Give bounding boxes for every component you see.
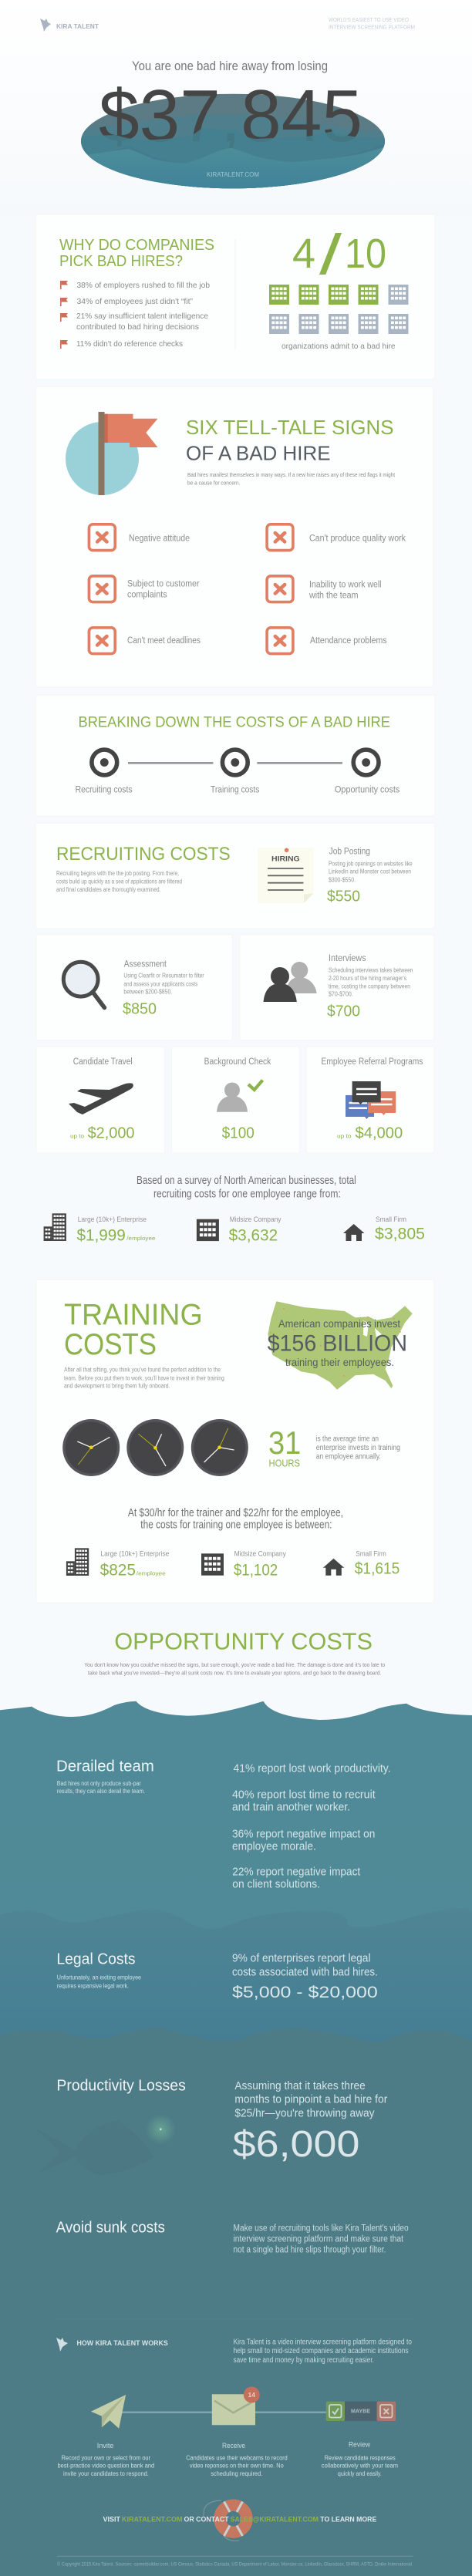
timeline labels: Recruiting costs xyxy=(76,785,133,794)
heading xyxy=(64,1299,203,1361)
heading: PICK BAD HIRES? xyxy=(59,253,183,270)
stat: 4/10 xyxy=(292,224,386,286)
step: invite: best-practice video question bank and xyxy=(57,2463,154,2470)
interviews text: time, costing the company between xyxy=(329,983,410,990)
step: review xyxy=(322,2441,398,2477)
label: Candidate Travel xyxy=(73,1057,133,1067)
map statement: American companies invest xyxy=(278,1317,400,1330)
panel: candidate travel xyxy=(36,1047,164,1153)
derailed team stats: 36% report negative impact on xyxy=(232,1828,375,1841)
stat: 31 hours: 31 xyxy=(268,1425,301,1461)
job posting text: Job Posting xyxy=(329,847,370,856)
heading: COSTS xyxy=(64,1328,157,1361)
assessment text xyxy=(123,959,204,995)
header xyxy=(40,18,415,32)
sign: customer complaints: complaints xyxy=(127,591,167,600)
icons: ten buildings xyxy=(269,285,409,334)
panel: training costs xyxy=(36,1280,434,1603)
call to action xyxy=(103,2515,376,2524)
job posting text: Posting job openings on websites like xyxy=(329,861,413,868)
training cost: large enterprise: Large (10k+) Enterprise xyxy=(100,1550,169,1559)
derailed team stats xyxy=(232,1762,391,1890)
avoid sunk costs text: Make use of recruiting tools like Kira Talent's video xyxy=(233,2224,409,2233)
sources line: © Copyright 2015 Kira Talent. Sources: careerbuilder.com, US Census, Statistics Canada, US Department of Labor, Monster.ca, LinkedIn, Glassdoor, SHRM, ASTD, Drake International xyxy=(57,2562,412,2568)
recruiting cost: large enterprise: Large (10k+) Enterprise xyxy=(78,1216,147,1224)
how Kira Talent works xyxy=(56,2319,413,2477)
interviews price: $700 xyxy=(327,1003,360,1020)
assessment text: between $200-$850. xyxy=(123,988,172,995)
stat text: is the average time an xyxy=(316,1435,379,1443)
legal costs stat: 9% of enterprises report legal xyxy=(232,1951,370,1964)
price: $4,000 xyxy=(355,1125,403,1142)
reason list: 38% of employers rushed to fill the job xyxy=(77,281,210,290)
sign: negative attitude xyxy=(89,524,190,551)
call to action: OR CONTACT xyxy=(184,2515,229,2524)
step: receive: video reponses on their own time. No xyxy=(190,2463,284,2470)
training cost: midsize: $1,102 xyxy=(234,1560,278,1579)
reason list: contributed to bad hiring decisions xyxy=(76,322,199,332)
derailed team heading: Derailed team xyxy=(56,1758,154,1775)
icon: hiring note xyxy=(258,848,314,903)
icon: envelope with badge: 14 xyxy=(248,2392,256,2399)
call to action: SALES@KIRATALENT.COM xyxy=(231,2515,319,2524)
section heading: HOW KIRA TALENT WORKS xyxy=(77,2339,168,2348)
heading: RECRUITING COSTS xyxy=(56,844,231,865)
derailed team xyxy=(56,1758,391,1890)
rate statement: the costs for training one employee is between: xyxy=(140,1519,332,1532)
survey statement xyxy=(137,1174,356,1200)
icon: life preserver xyxy=(204,2500,247,2541)
step: receive: Receive xyxy=(222,2442,245,2450)
intro text: be a cause for concern. xyxy=(187,481,241,486)
opportunity costs intro: take back what you've invested—they're all sunk costs now. It's time to evaluate your options, and go back to the drawing board. xyxy=(88,1670,381,1677)
panel: ocean waves xyxy=(0,1701,472,2576)
step: review: Review xyxy=(349,2441,370,2450)
interviews text: $70-$700. xyxy=(329,991,353,998)
intro text: and development to bring them fully onboard. xyxy=(64,1383,170,1390)
stat: 4/10: / xyxy=(319,224,342,286)
hero intro line: You are one bad hire away from losing xyxy=(132,59,328,73)
price: up to xyxy=(337,1133,352,1140)
stat: 4/10: 4 xyxy=(292,231,315,277)
job posting text: $300-$550. xyxy=(329,876,356,883)
sign: attendance: Attendance problems xyxy=(310,636,387,646)
sign: attendance xyxy=(267,628,387,654)
avoid sunk costs text xyxy=(233,2224,409,2255)
interviews text xyxy=(329,954,413,998)
productivity stat: $25/hr—you're throwing away xyxy=(234,2106,375,2119)
heading: TRAINING xyxy=(64,1299,203,1332)
step: invite: Record your own or select from our xyxy=(62,2454,150,2461)
derailed team description xyxy=(57,1780,145,1795)
tagline: WORLD'S EASIEST TO USE VIDEO xyxy=(329,18,409,23)
map statement xyxy=(268,1317,407,1368)
reason list: 34% of employees just didn't “fit” xyxy=(77,297,193,306)
interviews text: Interviews xyxy=(329,954,366,963)
map statement: $156 BILLION xyxy=(268,1331,407,1357)
step: review: collaboratively with your team xyxy=(322,2463,398,2470)
stat text: an employee annually. xyxy=(316,1453,381,1462)
sign: customer complaints: Subject to customer xyxy=(127,580,200,589)
interviews text: Scheduling interviews takes between xyxy=(329,967,413,974)
panel: interviews xyxy=(240,935,434,1040)
legal costs stat: costs associated with bad hires. xyxy=(232,1966,378,1979)
legal costs stat: $5,000 - $20,000 xyxy=(232,1983,378,2001)
recruiting cost: large enterprise xyxy=(44,1213,155,1244)
job posting price: $550 xyxy=(327,888,360,905)
training cost: large enterprise: /employee xyxy=(137,1570,166,1576)
productivity stat xyxy=(233,2079,387,2165)
reason list xyxy=(60,281,210,349)
derailed team stats: 40% report lost time to recruit xyxy=(232,1789,376,1802)
sign: quality work: Can't produce quality work xyxy=(309,534,406,544)
assessment text: and assess your applicants costs xyxy=(123,980,197,987)
intro text xyxy=(187,473,395,486)
call to action: VISIT xyxy=(103,2515,120,2524)
productivity heading: Productivity Losses xyxy=(56,2078,186,2095)
tagline: INTERVIEW SCREENING PLATFORM xyxy=(329,25,415,31)
legal costs heading: Legal Costs xyxy=(56,1951,136,1968)
interviews text: 2-20 hours of the hiring manager's xyxy=(329,975,406,982)
sign: teamwork: Inability to work well xyxy=(309,581,381,590)
intro text: Recruiting begins with the the job posting. From there, xyxy=(56,870,179,877)
call to action: KIRATALENT.COM xyxy=(122,2515,183,2524)
legal costs xyxy=(56,1951,378,2001)
intro text: After all that sifting, you think you've found the perfect addition to the xyxy=(64,1367,221,1374)
avoid sunk costs xyxy=(56,2219,409,2255)
training cost: small firm: Small Firm xyxy=(356,1550,386,1559)
recruiting cost: small firm: Small Firm xyxy=(376,1216,406,1224)
derailed team stats: 41% report lost work productivity. xyxy=(233,1762,391,1775)
derailed team stats: employee morale. xyxy=(232,1839,316,1853)
heading: WHY DO COMPANIES xyxy=(59,237,214,254)
training cost: large enterprise xyxy=(66,1548,169,1579)
hero xyxy=(77,59,389,193)
derailed team stats: on client solutions. xyxy=(232,1877,320,1890)
recruiting cost: midsize: Midsize Company xyxy=(230,1216,282,1224)
panel: why bad hires xyxy=(35,214,435,379)
legal costs description xyxy=(57,1974,141,1989)
training cost: small firm xyxy=(323,1550,400,1578)
icon: chat bubbles xyxy=(346,1081,396,1119)
job posting text: LinkedIn and Monster cost between xyxy=(329,868,411,875)
recruiting cost: midsize: $3,632 xyxy=(229,1226,278,1244)
reason list: 11% didn't do reference checks xyxy=(76,339,183,349)
avoid sunk costs text: interview screening platform and make sure that xyxy=(233,2235,404,2244)
stat: 31 hours: HOURS xyxy=(268,1458,300,1469)
logo wordmark: KIRA TALENT xyxy=(56,22,99,30)
illustration: deep sea fish xyxy=(33,2114,176,2175)
icon: hiring note: HIRING xyxy=(271,855,300,864)
sign: quality work xyxy=(267,524,406,551)
stat: 4/10: 10 xyxy=(345,231,386,277)
assessment text: Using Clearfit or Resumator to filter xyxy=(123,973,204,979)
heading: OF A BAD HIRE xyxy=(186,442,330,465)
intro text: Bad hires manifest themselves in many ways. If a new hire raises any of these red flags it might xyxy=(187,473,395,478)
opportunity costs heading: OPPORTUNITY COSTS xyxy=(114,1627,373,1654)
rate statement xyxy=(128,1507,343,1532)
training cost: midsize xyxy=(201,1550,286,1579)
heading: BREAKING DOWN THE COSTS OF A BAD HIRE xyxy=(79,714,390,731)
recruiting cost: large enterprise: $1,999 xyxy=(77,1226,126,1244)
map: USA xyxy=(268,1301,413,1390)
productivity losses xyxy=(33,2078,387,2175)
timeline xyxy=(92,750,379,775)
step: invite xyxy=(57,2442,154,2477)
derailed team stats: and train another worker. xyxy=(232,1800,350,1813)
legal costs description: Unfortunately, an exiting employee xyxy=(57,1974,141,1981)
sign: teamwork: with the team xyxy=(308,591,358,600)
icon: airplane xyxy=(69,1083,133,1114)
productivity stat: months to pinpoint a bad hire for xyxy=(234,2093,387,2106)
survey statement: recruiting costs for one employee range from: xyxy=(153,1187,341,1200)
assessment price: $850 xyxy=(123,1000,157,1017)
label: Background Check xyxy=(204,1057,271,1067)
stat text: enterprise invests in training xyxy=(316,1444,400,1452)
panel: recruiting costs xyxy=(35,823,435,929)
productivity stat: $6,000 xyxy=(233,2124,359,2165)
intro text: and final candidates are thoroughly examined. xyxy=(56,886,160,893)
intro text: costs build up quickly as a sea of applications are filtered xyxy=(56,878,182,885)
hero amount: $37,845 xyxy=(99,75,362,157)
section description: Kira Talent is a video interview screening platform designed to xyxy=(233,2338,412,2346)
stat text xyxy=(316,1435,400,1462)
connector line xyxy=(120,2411,328,2413)
step: invite: Invite xyxy=(97,2442,114,2450)
section description: save time and money by making recruiting easier. xyxy=(233,2356,374,2365)
survey statement: Based on a survey of North American businesses, total xyxy=(137,1174,356,1187)
assessment text: Assessment xyxy=(124,959,167,969)
intro text xyxy=(56,870,182,893)
sign: deadlines xyxy=(89,628,201,654)
section description xyxy=(233,2338,412,2365)
label: Employee Referral Programs xyxy=(321,1057,423,1067)
intro text xyxy=(64,1367,224,1390)
section description: help small to mid-sized companies and academic institutions xyxy=(233,2347,409,2355)
recruiting cost: small firm xyxy=(343,1216,425,1243)
job posting text xyxy=(329,847,413,883)
reason list: 21% say insufficient talent intelligence xyxy=(76,312,208,321)
hero water overlay xyxy=(77,127,389,193)
derailed team stats: 22% report negative impact xyxy=(232,1866,361,1879)
derailed team description: results, they can also derail the team. xyxy=(57,1788,145,1795)
timeline labels: Training costs xyxy=(211,785,260,794)
sign: customer complaints xyxy=(89,576,200,602)
icon: three clocks xyxy=(62,1419,248,1476)
recruiting cost: large enterprise: /employee xyxy=(126,1235,155,1242)
recruiting cost: small firm: $3,805 xyxy=(375,1225,425,1243)
icon: review toggle xyxy=(326,2402,396,2421)
step: review: Review candidate responses xyxy=(325,2454,396,2461)
sign: teamwork xyxy=(267,576,381,602)
heading xyxy=(59,237,214,270)
timeline labels: Opportunity costs xyxy=(335,785,400,794)
icon: paper plane xyxy=(91,2395,126,2429)
heading: SIX TELL-TALE SIGNS xyxy=(186,416,393,439)
avoid sunk costs heading: Avoid sunk costs xyxy=(56,2219,165,2236)
price: up to xyxy=(70,1133,84,1140)
panel: assessment xyxy=(36,935,232,1040)
productivity stat: Assuming that it takes three xyxy=(234,2079,366,2092)
icon: person with check xyxy=(217,1080,262,1112)
step: receive xyxy=(186,2442,288,2477)
timeline labels xyxy=(76,785,400,794)
map statement: training their employees. xyxy=(285,1356,394,1368)
tagline xyxy=(329,18,415,31)
legal costs description: requires expansive legal work. xyxy=(57,1982,129,1989)
icon: logo light xyxy=(56,2338,68,2352)
training cost: large enterprise: $825 xyxy=(100,1560,136,1579)
step: review: quickly and easily. xyxy=(338,2470,382,2477)
recruiting cost: midsize xyxy=(197,1216,282,1244)
opportunity costs intro: You don't know how you could've missed the signs, but sure enough, you've made a bad hire. The damage is done and it's too late to xyxy=(84,1661,385,1668)
opportunity costs intro xyxy=(84,1661,385,1677)
panel: referral programs xyxy=(306,1047,434,1153)
training cost: midsize: Midsize Company xyxy=(234,1550,286,1559)
derailed team description: Bad hires not only produce sub-par xyxy=(57,1780,141,1787)
step: receive: Candidates use their webcams to record xyxy=(186,2454,288,2461)
legal costs stat xyxy=(232,1951,378,2001)
call to action: TO LEARN MORE xyxy=(320,2515,376,2524)
rate statement: At $30/hr for the trainer and $22/hr for the employee, xyxy=(128,1507,343,1519)
sign: deadlines: Can't meet deadlines xyxy=(127,636,201,646)
icon: review toggle: MAYBE xyxy=(351,2408,370,2415)
training cost: small firm: $1,615 xyxy=(355,1559,400,1578)
icon: Kira Talent logo xyxy=(40,19,51,32)
price: $100 xyxy=(222,1125,255,1142)
sign: negative attitude: Negative attitude xyxy=(129,534,190,544)
icon: red flag on circle xyxy=(66,412,157,495)
avoid sunk costs text: not a single bad hire slips through your filter. xyxy=(233,2246,386,2255)
icon: envelope with badge xyxy=(212,2386,260,2425)
hero water ellipse xyxy=(77,93,389,193)
icon: magnifier xyxy=(63,962,104,1007)
panel: six tell-tale signs xyxy=(35,386,433,687)
step: invite: invite your candidates to respond. xyxy=(63,2470,149,2477)
intro text: team. Before you put them to work, you'll have to invest in their training xyxy=(64,1374,224,1381)
price: $2,000 xyxy=(88,1125,134,1142)
icon: two people xyxy=(264,962,317,1002)
panel: background check xyxy=(171,1047,299,1153)
panel: breaking down the costs xyxy=(35,695,435,816)
hero site label: KIRATALENT.COM xyxy=(207,171,259,178)
heading xyxy=(186,416,393,465)
step: receive: scheduling required. xyxy=(211,2470,262,2477)
stat caption: organizations admit to a bad hire xyxy=(282,342,396,351)
